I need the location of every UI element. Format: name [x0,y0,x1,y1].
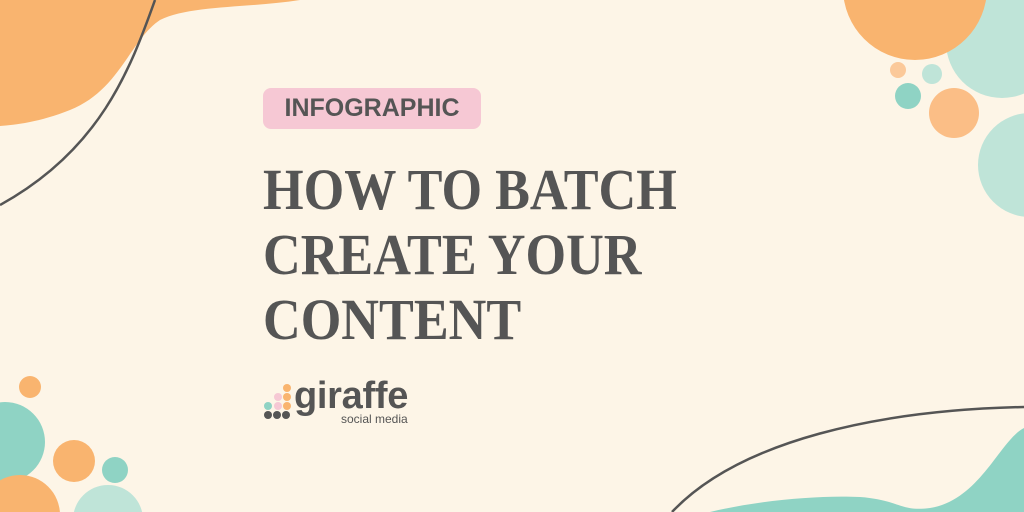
badge: INFOGRAPHIC [263,88,481,129]
logo: giraffe social media: social media [341,412,408,426]
badge: INFOGRAPHIC: INFOGRAPHIC [284,94,460,122]
logo: giraffe social media [264,375,408,426]
line: top-left [0,0,155,205]
title: HOW TO BATCH [263,157,677,222]
title [263,157,677,352]
logo text: giraffe [294,375,408,417]
blob: top-left orange [0,0,300,126]
circles: top-right [843,0,1024,217]
icon: dots [264,384,291,419]
line: bottom-right [672,407,1024,512]
title: CREATE YOUR [263,222,641,287]
circles: bottom-left [0,376,143,512]
title: CONTENT [263,287,521,352]
blob: bottom-right teal [710,428,1024,512]
